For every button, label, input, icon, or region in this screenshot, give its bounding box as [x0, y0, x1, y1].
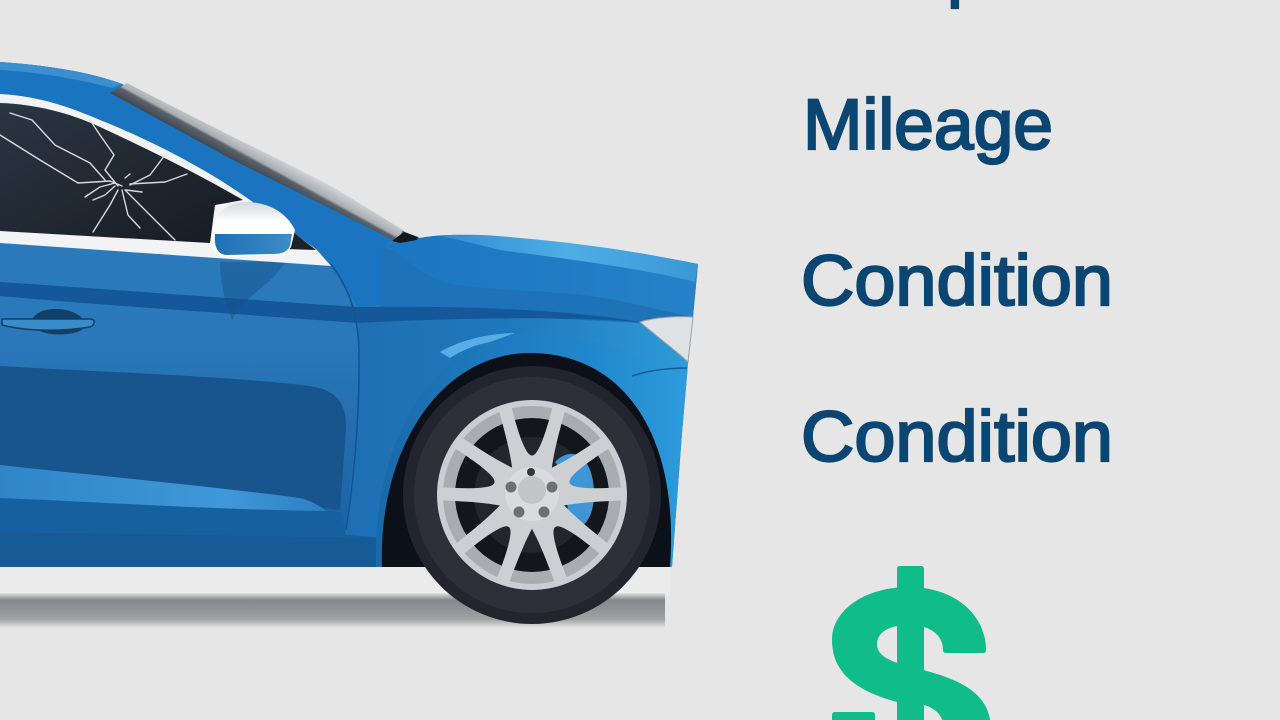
- rim spokes: [436, 405, 628, 588]
- wiper: [392, 232, 418, 243]
- roof highlight: [0, 62, 122, 88]
- side window with cracks: [0, 103, 316, 250]
- headlight: [640, 317, 693, 362]
- tyre: [403, 366, 661, 624]
- car illustration: [0, 62, 698, 624]
- fender crease line: [632, 368, 687, 376]
- label: Condition: Condition: [801, 242, 1113, 321]
- icon: green dollar sign: [832, 566, 991, 720]
- label: Condition repeated: Condition: [801, 398, 1113, 477]
- front fender: [345, 315, 688, 567]
- shattered glass cracks: [0, 113, 187, 240]
- ground shadow: [0, 567, 670, 628]
- wheel arch: [382, 353, 671, 567]
- car body: [0, 62, 698, 567]
- wheel arch flare: [376, 333, 686, 567]
- hub with bolts: [505, 467, 559, 521]
- brake caliper: [555, 454, 594, 529]
- door light strip: [0, 465, 326, 511]
- window frame: [0, 94, 331, 266]
- mirror shadow on door: [220, 262, 285, 320]
- label: Mileage: Mileage: [803, 86, 1053, 165]
- hood: [385, 235, 698, 317]
- band between hood and crease: [380, 247, 693, 323]
- wheel: [382, 353, 671, 624]
- door shaded panel: [0, 366, 346, 510]
- body crease: [0, 282, 640, 323]
- door shut line: [331, 264, 359, 530]
- rim and opening: [437, 400, 627, 590]
- roof and pillar panel: [0, 62, 420, 308]
- door handle: [2, 309, 94, 334]
- A-pillar trim: [110, 83, 403, 242]
- rocker panel: [0, 495, 384, 567]
- side mirror: [212, 202, 295, 257]
